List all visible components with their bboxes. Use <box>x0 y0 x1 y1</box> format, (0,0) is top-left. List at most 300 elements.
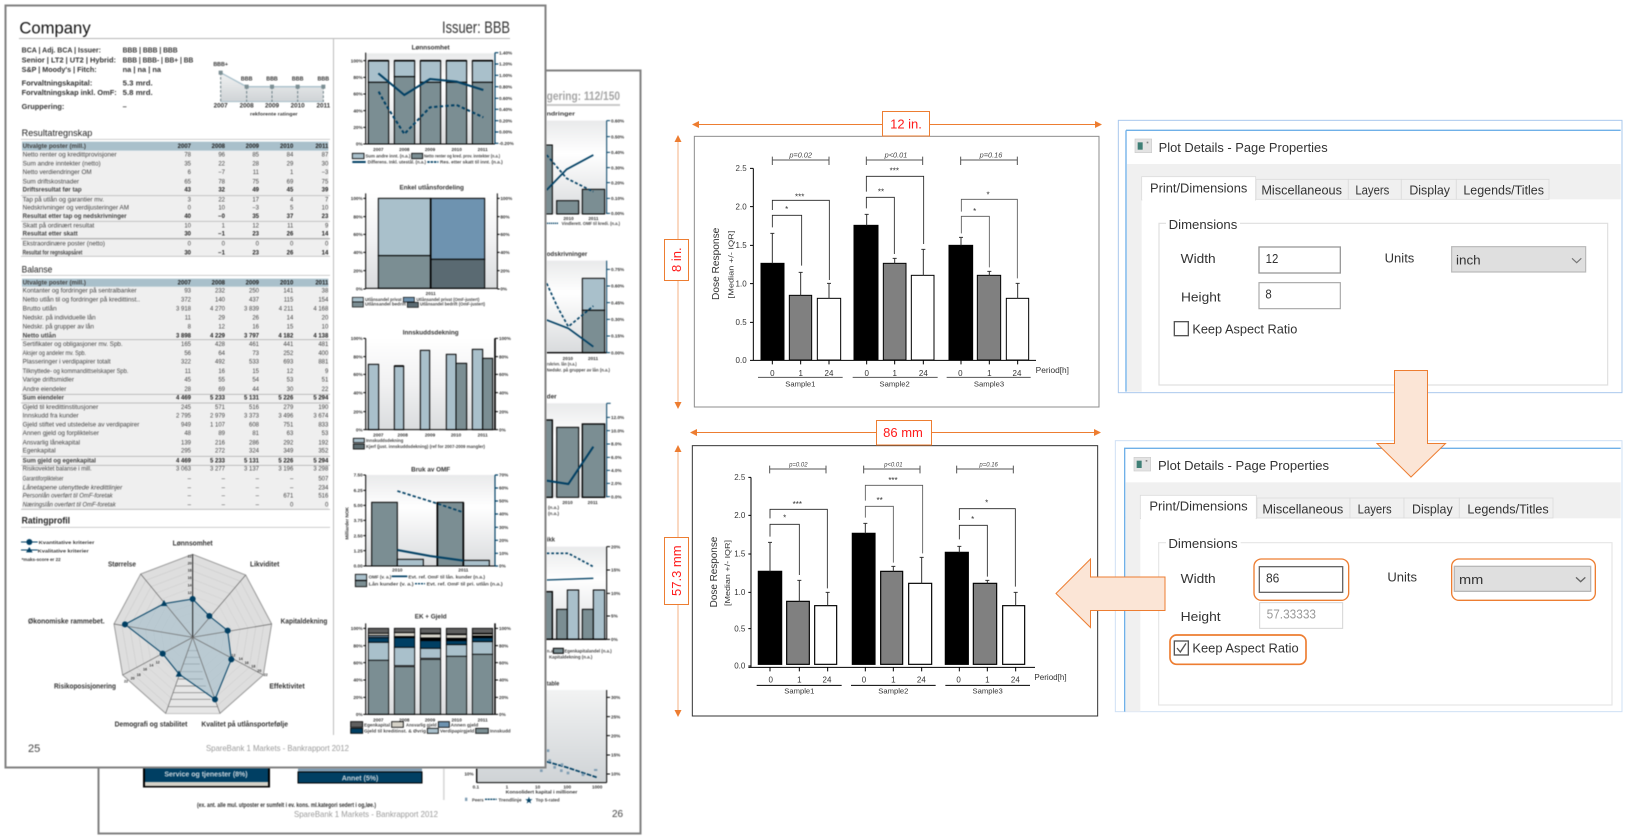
table: Balanse: 516 <box>318 494 329 500</box>
table: Resultatregnskap: 65 <box>184 179 192 185</box>
axes: Sample3 <box>974 380 1004 389</box>
panel: back report page 26: 10% <box>611 772 621 777</box>
dimensions group box: Dimensions <box>1169 218 1237 232</box>
chart: Innskuddsdekning: Innskuddsdekning <box>366 438 403 443</box>
front page footer: SpareBank 1 Markets - Bankrapport 2012 <box>206 743 349 753</box>
radar chart: 16 <box>245 661 249 665</box>
back page charts visible behind the front page: 2010 <box>563 356 573 361</box>
table: Resultatregnskap: 87 <box>322 153 329 159</box>
table: Balanse: 232 <box>215 289 226 295</box>
chart: EK + Gjeld: Annen gjeld <box>451 723 478 728</box>
table: Balanse: 89 <box>218 431 226 437</box>
heading: Resultatregnskap: Resultatregnskap <box>22 128 92 138</box>
highlight: units combo <box>1452 559 1595 600</box>
chart: EK + Gjeld: 40% <box>499 678 509 683</box>
table: Balanse: 4 469 <box>176 459 192 465</box>
table: Resultatregnskap: 2009 <box>246 144 260 150</box>
dimensions group box: 12 <box>1266 252 1278 266</box>
table: Balanse: 26 <box>252 316 260 322</box>
table: Balanse: Brutto utlån <box>23 305 57 312</box>
table: Balanse: 5 233 <box>210 459 226 465</box>
table: Balanse: 881 <box>318 360 329 366</box>
significance brackets <box>770 466 1015 588</box>
table: Resultatregnskap: 96 <box>218 153 226 159</box>
panel: back report page 26: 10 <box>535 784 541 789</box>
chart: Innskuddsdekning: 40% <box>353 390 364 395</box>
radar chart: 22 <box>124 680 128 684</box>
panel: back report page 26: ★ <box>525 795 533 805</box>
chart: Bruk av OMF: 2011 <box>458 568 469 573</box>
chart: Enkel utlånsfordeling: 80% <box>353 214 364 219</box>
radar axis labels: Likviditet <box>250 562 280 569</box>
height dimension arrow: 57.3 mm: 57.3 mm <box>669 545 684 596</box>
p values and stars: * <box>783 513 786 522</box>
table: Balanse: Gjeld stiftet ved utstedelse av verdipapirer <box>23 422 139 428</box>
back page charts visible behind the front page: der <box>547 394 557 401</box>
axes: [Median +/- IQR] <box>726 231 735 298</box>
chart: EK + Gjeld: 80% <box>353 643 364 648</box>
axes: Sample3 <box>973 687 1003 696</box>
chart: Lønnsomhet: Differens. Inkl. utestål. (n.a.) <box>368 159 426 165</box>
back page charts visible behind the front page: 0.00% <box>611 350 625 355</box>
back page charts visible behind the front page: 0.10% <box>611 196 625 201</box>
back page charts visible behind the front page: 0.20% <box>611 180 625 185</box>
table: Resultatregnskap: 1 <box>290 170 294 176</box>
axes: Sample1 <box>785 380 815 389</box>
table: Balanse: 29 <box>218 316 226 322</box>
back page charts visible behind the front page: Vindlerett. OMF til kredi. (n.a.) <box>562 221 620 226</box>
table: Balanse: 4 168 <box>313 306 329 312</box>
table: Resultatregnskap: Ekstraordinære poster (netto) <box>23 241 105 247</box>
radar axis labels: Lønnsomhet <box>173 540 213 547</box>
axes: 2.0 <box>734 511 746 520</box>
table: Balanse: 20 <box>322 316 329 322</box>
panel: back report page 26: Konsolidert kapital i millioner <box>506 789 577 795</box>
table: Balanse: 3 918 <box>176 306 192 312</box>
table: Balanse: 4 138 <box>313 334 329 340</box>
radar chart: 20 <box>131 676 135 680</box>
section: Balanse <box>21 264 330 510</box>
arrow: down between dialogs <box>1377 370 1446 477</box>
table: Resultatregnskap: 35 <box>252 214 260 220</box>
radar chart: 22 <box>264 673 268 677</box>
panel: front report page 25 <box>6 6 546 768</box>
table: Balanse: 3 298 <box>313 467 329 473</box>
table: Resultatregnskap: −0 <box>218 214 226 220</box>
chart: Lønnsomhet: 0.20% <box>499 118 513 123</box>
radar legend: *maks-score er 22 <box>22 557 61 562</box>
chart: EK + Gjeld: EK + Gjeld <box>415 614 447 621</box>
chart: Innskuddsdekning: 2009 <box>425 433 436 438</box>
axes: 1 <box>985 676 990 685</box>
table: Resultatregnskap: 75 <box>322 179 329 185</box>
rating history mini chart: BBB+ <box>213 62 228 68</box>
chart: Innskuddsdekning: Kjerf (just. innskuddsdekning) (ref for 2007-2009 mangler) <box>366 444 485 449</box>
chart: Lønnsomhet: 2007 <box>373 147 384 152</box>
chart: EK + Gjeld: 40% <box>353 678 364 683</box>
p values and stars <box>785 151 1003 216</box>
table: Balanse: Ansvarlig lånekapital <box>23 439 80 446</box>
p values and stars: * <box>971 515 974 524</box>
table: Resultatregnskap: Resultat etter tap og nedskrivninger <box>23 214 127 220</box>
table: Balanse: 533 <box>249 360 260 366</box>
panel: back report page 26: 4.0% <box>611 468 622 473</box>
axes: 24 <box>1011 676 1020 685</box>
chart: Innskuddsdekning: 2007 <box>373 433 384 438</box>
dimensions group box: inch <box>1456 253 1481 267</box>
table: Balanse: 3 137 <box>244 467 260 473</box>
tabs: Print/Dimensions <box>1150 181 1247 195</box>
table: Resultatregnskap: 23 <box>252 250 260 256</box>
table: Resultatregnskap: 75 <box>252 179 260 185</box>
table: Balanse: 14 <box>287 316 294 322</box>
table: Resultatregnskap: 28 <box>252 162 260 168</box>
radar axis labels: Økonomiske rammebet. <box>28 619 105 626</box>
chart: Bruk av OMF: Evt. ref. OmF til lån. kunder (n.a.) <box>408 573 485 579</box>
chart: Bruk av OMF: 2010 <box>392 568 403 573</box>
table: Resultatregnskap: Netto verdiendringer OM <box>23 170 92 176</box>
tabs: Display <box>1412 502 1453 516</box>
table: Balanse: 69 <box>218 387 226 393</box>
chart: EK + Gjeld: Innskudd <box>490 729 511 734</box>
table: Balanse: 15 <box>252 369 260 375</box>
table: Balanse: Varige driftsmidler <box>23 377 74 383</box>
table: Balanse: 73 <box>252 351 260 357</box>
back page charts visible behind the front page: 2011 <box>588 356 599 361</box>
axes: 0.5 <box>734 624 746 633</box>
table: Balanse: 5 131 <box>244 395 260 401</box>
chart: Enkel utlånsfordeling: Utlånsandel privat (OmF-justert) <box>416 296 480 302</box>
chart: EK + Gjeld: 2010 <box>451 717 462 722</box>
table: Resultatregnskap: 26 <box>287 231 294 237</box>
table: Balanse: 22 <box>322 387 329 393</box>
chart: Bruk av OMF <box>344 466 509 587</box>
rating history mini chart: 2011 <box>316 102 331 109</box>
panel: back report page 26: 8.0% <box>611 442 622 447</box>
axes: 0.0 <box>736 356 747 365</box>
tabs: Legends/Titles <box>1463 183 1544 197</box>
table: Balanse: Andre eiendeler <box>23 387 66 393</box>
table: Balanse: 571 <box>215 405 226 411</box>
table: Resultatregnskap: 6 <box>188 170 192 176</box>
chart: Innskuddsdekning: 60% <box>353 372 364 377</box>
table: Balanse: 3 063 <box>176 467 192 473</box>
chart: Enkel utlånsfordeling: 0% <box>356 286 364 291</box>
height dimension arrow: 57.3 mm <box>664 445 688 717</box>
table: Balanse: 461 <box>249 342 260 348</box>
table: Resultatregnskap: 10 <box>322 206 329 212</box>
heading: Ratingprofil: Ratingprofil <box>22 516 70 526</box>
table: Resultatregnskap: 11 <box>287 223 294 229</box>
dialog icon <box>1134 457 1151 471</box>
p values and stars <box>783 463 999 524</box>
dimensions group box: 86 <box>1266 572 1279 586</box>
back page footnote: (ex. ant. alle mul. utposter er sumfelt i ev. kons. ml.kategori sedert i og,løe.) <box>197 803 376 809</box>
chart: Lønnsomhet: 0.60% <box>499 96 513 101</box>
panel: back report page 26: 0% <box>611 637 619 642</box>
table: Balanse: 4 182 <box>278 334 294 340</box>
chart: EK + Gjeld: 0% <box>356 712 364 717</box>
table: Balanse: 286 <box>249 440 260 446</box>
table: Resultatregnskap: 30 <box>184 231 192 237</box>
table: Balanse: 3 797 <box>244 334 260 340</box>
table: Balanse: 3 839 <box>244 306 260 312</box>
tabs <box>1140 495 1553 521</box>
table: Balanse: 4 469 <box>176 395 192 401</box>
radar legend: Kvantitative kriterier <box>39 540 94 546</box>
axes: Dose Response <box>709 537 720 607</box>
width dimension arrow: 12 in. <box>692 112 1102 136</box>
chart: Bruk av OMF: 20% <box>499 538 509 543</box>
table: Resultatregnskap: 12 <box>252 223 260 229</box>
chart: Lønnsomhet: 0.40% <box>499 107 513 112</box>
chart: EK + Gjeld: 20% <box>499 695 509 700</box>
panel: back report page 26: Peers <box>472 797 484 802</box>
chart: Innskuddsdekning <box>351 330 512 449</box>
chart: Enkel utlånsfordeling: Enkel utlånsfordeling <box>399 184 464 192</box>
back page pie-bar segment: Service og tjenester <box>144 766 269 786</box>
table: Balanse: 51 <box>322 377 329 383</box>
table: Balanse: 53 <box>322 431 329 437</box>
chart: Lønnsomhet: 0% <box>356 142 364 147</box>
back page charts visible behind the front page: rskrivn. lån (n.a.) <box>547 360 577 366</box>
table: Balanse: – <box>290 476 294 482</box>
chart: Enkel utlånsfordeling <box>351 184 513 307</box>
table: Balanse: Annen gjeld og forpliktelser <box>23 431 99 437</box>
table: Balanse: 292 <box>283 440 294 446</box>
table: Balanse: 437 <box>249 298 260 304</box>
axes: 0.5 <box>736 318 747 327</box>
table: Balanse: 751 <box>283 422 294 428</box>
table: Balanse: 28 <box>184 387 192 393</box>
table: Balanse: 54 <box>252 377 260 383</box>
table: Balanse: 2 795 <box>176 413 192 419</box>
table: Resultatregnskap: 11 <box>253 170 260 176</box>
radar legend <box>21 539 94 562</box>
table: Balanse: Kontanter og fordringer på sentralbanker <box>23 288 137 295</box>
table: Resultatregnskap: −1 <box>218 250 226 256</box>
axes: 1.5 <box>736 241 747 250</box>
dimensions group box: 57.33333 <box>1267 607 1316 621</box>
section: Ratingprofil <box>21 516 330 729</box>
radar axis labels: Risikoposisjonering <box>54 683 116 690</box>
table: Balanse: 115 <box>284 298 294 304</box>
chart: EK + Gjeld: 0% <box>499 712 507 717</box>
table: Balanse: 55 <box>218 377 226 383</box>
table: Balanse: 949 <box>181 422 192 428</box>
table: Balanse: Netto utlån til og fordringer på kredittinst.. <box>23 297 140 304</box>
chart: Bruk av OMF: 0.00 <box>354 564 363 569</box>
table: Balanse: 234 <box>318 485 329 491</box>
chart: Innskuddsdekning: 100% <box>351 336 364 341</box>
chart: Enkel utlånsfordeling: Utlånsandel privat <box>365 296 402 302</box>
table: Balanse: 16 <box>218 369 226 375</box>
panel: back report page 26: Egenkapitalandel (n.a.) <box>564 648 612 653</box>
rating history mini chart: BBB <box>292 76 304 82</box>
table: Balanse: Næringslån overført til OmF-foretak <box>23 501 117 508</box>
front page left column <box>19 18 331 729</box>
table: Resultatregnskap: 69 <box>287 179 294 185</box>
tabs: Print/Dimensions <box>1149 499 1248 513</box>
table: Resultatregnskap: 23 <box>322 214 329 220</box>
table: Resultatregnskap: 3 <box>188 197 192 203</box>
back page charts visible behind the front page: 2011 <box>588 216 599 221</box>
axes: 24 <box>823 676 832 685</box>
table: Resultatregnskap: 14 <box>322 250 329 256</box>
table: Balanse: 30 <box>287 387 294 393</box>
table: Balanse: 53 <box>287 377 294 383</box>
dimensions group box: Units <box>1387 571 1417 585</box>
radar chart: 14 <box>149 664 154 668</box>
table: Balanse: – <box>290 485 294 491</box>
table: Resultatregnskap: 43 <box>184 188 192 194</box>
axes: 0 <box>768 676 773 685</box>
table: Balanse: – <box>256 485 260 491</box>
radar chart: 12 <box>231 654 235 658</box>
radar chart: 16 <box>143 668 147 672</box>
table: Balanse: 4 270 <box>210 306 226 312</box>
chart: EK + Gjeld: 2011 <box>478 717 488 722</box>
panel: bottom dialog Plot Details mm <box>1115 441 1622 712</box>
chart: Innskuddsdekning: 20% <box>353 409 364 414</box>
chart: Bruk av OMF: 30% <box>499 525 509 530</box>
table: Balanse: 4 229 <box>210 334 226 340</box>
radar axis labels: Effektivitet <box>269 683 305 690</box>
axes: 0.0 <box>734 662 746 671</box>
issuer info block: Gruppering: <box>22 102 64 111</box>
table: Resultatregnskap: 23 <box>252 231 260 237</box>
table: Resultatregnskap: 22 <box>218 162 226 168</box>
back page charts visible behind the front page: 0.30% <box>611 317 625 322</box>
axes <box>709 473 1067 696</box>
axes: 0 <box>956 676 961 685</box>
chart: Innskuddsdekning: 20% <box>499 409 509 414</box>
table: Resultatregnskap: 5 <box>290 206 294 212</box>
back page charts visible behind the front page: 0.00% <box>611 211 625 216</box>
axes: Sample2 <box>880 380 910 389</box>
panel: back report page 26: 5% <box>611 614 619 619</box>
highlight: keep aspect ratio <box>1170 635 1306 664</box>
chart: Innskuddsdekning: 2011 <box>478 433 488 438</box>
panel: back report page 26: 1000 <box>592 784 603 789</box>
table: Balanse: 10 <box>322 324 329 330</box>
chart: Enkel utlånsfordeling: 20% <box>353 268 364 273</box>
chart: Innskuddsdekning: 0% <box>499 427 507 432</box>
significance brackets <box>772 157 1017 280</box>
dimensions group box: Height <box>1181 610 1221 624</box>
radar chart: 16 <box>188 576 192 580</box>
p values and stars: ** <box>877 496 883 505</box>
table: Resultatregnskap: 26 <box>287 250 294 256</box>
table: Balanse: 38 <box>322 289 329 295</box>
axes: [Median +/- IQR] <box>723 540 732 606</box>
table: Balanse: 833 <box>318 422 329 428</box>
table: Resultatregnskap: −1 <box>218 231 226 237</box>
table: Balanse: 693 <box>283 360 294 366</box>
table: Balanse: Nedskr. på grupper av lån <box>23 323 94 330</box>
tabs: Display <box>1409 183 1451 197</box>
table: Resultatregnskap: 2011 <box>315 144 329 150</box>
rating history mini chart: BBB <box>241 76 253 82</box>
table: Balanse: 3 496 <box>278 413 294 419</box>
front page right charts group 2 <box>344 466 512 734</box>
issuer info block: Forvaltningskap inkl. OmF: <box>22 88 117 97</box>
table: Balanse <box>21 275 330 510</box>
radar chart: 20 <box>188 561 192 565</box>
chart: Enkel utlånsfordeling: 100% <box>500 196 513 201</box>
heading: Balanse: Balanse <box>22 264 52 274</box>
chart: EK + Gjeld: 100% <box>499 626 512 631</box>
panel: back report page 26: 1 <box>506 784 509 789</box>
table: Resultatregnskap: 39 <box>322 188 329 194</box>
height dimension arrow: 8 in. <box>664 135 688 409</box>
chart: Lønnsomhet: -0.20% <box>499 141 515 146</box>
radar chart: 12 <box>156 660 160 664</box>
back page charts visible behind the front page: ndringer <box>547 112 576 118</box>
panel: back report page 26: 2011 <box>588 500 598 505</box>
table: Balanse: 481 <box>318 342 329 348</box>
chart: Bruk av OMF: 10% <box>499 551 509 556</box>
table: Balanse: 4 211 <box>279 306 294 312</box>
panel: back report page 26: Trendlinje <box>498 797 522 802</box>
dimensions group box: Height <box>1181 290 1221 304</box>
chart: Lønnsomhet: Sum andre innt. (n.a.) <box>365 154 411 159</box>
table: Balanse: 192 <box>318 440 329 446</box>
p values and stars: *** <box>890 167 899 176</box>
table: Balanse: Tilknyttede- og kommandittselskaper Spb. <box>23 369 129 375</box>
back page pie-bar segment: Service og tjenester: Service og tjenester (8%) <box>164 772 248 778</box>
table: Resultatregnskap: 1 <box>222 223 226 229</box>
axes: 0 <box>864 369 869 378</box>
panel: back report page 26: Kapitaldekning (n.a.) <box>549 654 593 659</box>
chart: Innskuddsdekning: Innskuddsdekning <box>403 330 459 337</box>
issuer info block <box>22 46 193 111</box>
table: Balanse: 216 <box>215 440 226 446</box>
table: Resultatregnskap: 0 <box>188 241 192 247</box>
p values and stars: * <box>986 191 990 200</box>
table: Resultatregnskap: 35 <box>184 162 192 168</box>
rating history mini chart <box>213 62 331 117</box>
chart: EK + Gjeld: 100% <box>351 626 364 631</box>
table: Balanse: 63 <box>287 431 294 437</box>
back page charts visible behind the front page: 0.60% <box>611 118 625 123</box>
chart: EK + Gjeld: 2007 <box>373 717 384 722</box>
height dimension arrow: 8 in.: 8 in. <box>669 247 684 272</box>
chart: Lønnsomhet: 2011 <box>478 147 488 152</box>
table: Balanse: – <box>256 502 260 508</box>
chart: Bruk av OMF: 2.50 <box>354 533 363 538</box>
back page charts visible behind the front page: 0.60% <box>611 284 625 289</box>
p values and stars: p<0.01 <box>884 151 907 160</box>
chart: Lønnsomhet <box>351 45 515 165</box>
chart: Bruk av OMF: OMF (v. a.) <box>369 574 392 579</box>
panel: top bar plot 12 in x 8 in <box>694 136 1099 407</box>
table: Balanse: Aksjer og andeler mv. Spb. <box>23 351 86 357</box>
table: Balanse: 16 <box>252 324 260 330</box>
back page charts visible behind the front page: gering: 112/150 <box>547 89 620 103</box>
width dimension arrow: 86 mm <box>690 420 1101 445</box>
table: Balanse: 324 <box>249 449 260 455</box>
panel: back report page 26: 15% <box>611 753 621 758</box>
panel: back report page 26: n.a.) <box>547 648 557 653</box>
back page charts visible behind the front page: 0.40% <box>611 150 625 155</box>
table: Balanse: 5 226 <box>278 459 294 465</box>
table: Balanse: – <box>222 494 226 500</box>
table: Resultatregnskap: 2008 <box>212 144 226 150</box>
tabs: Layers <box>1358 502 1392 516</box>
p values and stars: *** <box>795 192 804 201</box>
table: Balanse: 81 <box>252 431 260 437</box>
